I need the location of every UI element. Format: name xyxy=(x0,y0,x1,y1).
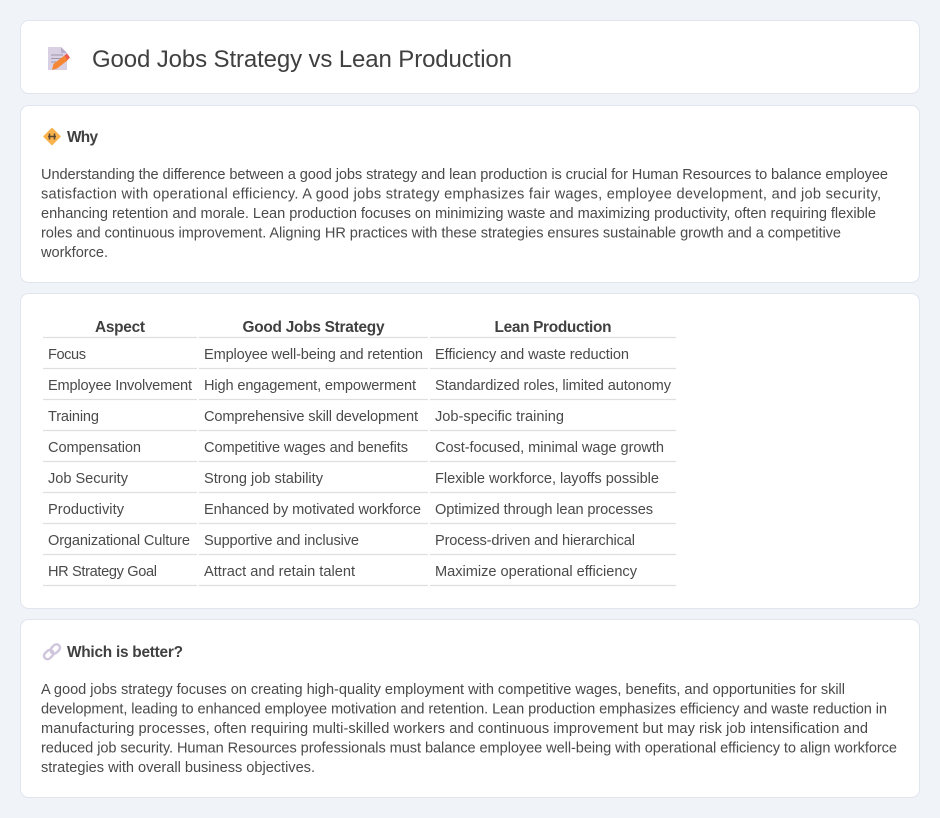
row: training xyxy=(48,409,564,425)
text block: why: Understanding the difference between a good jobs strategy and lean production is crucial for Human Resources to balance employee xyxy=(41,167,888,183)
row: organizational culture: Supportive and inclusive xyxy=(204,533,359,549)
row: focus: Employee well-being and retention xyxy=(204,347,423,363)
row: employee involvement: Standardized roles, limited autonomy xyxy=(435,378,672,394)
row: organizational culture xyxy=(48,533,635,549)
row: compensation: Compensation xyxy=(48,440,141,456)
text block: why: satisfaction with operational efficiency. A good jobs strategy emphasizes fair wages, employee development, and job security, xyxy=(41,186,881,202)
text block: which is better: strategies with overall business objectives. xyxy=(41,760,315,776)
row: organizational culture: Organizational Culture xyxy=(48,533,190,549)
row: job security: Flexible workforce, layoffs possible xyxy=(435,471,659,487)
text block: why: roles and continuous improvement. Aligning HR practices with these strategies ensures sustainable growth and a competitive xyxy=(41,226,841,242)
row: focus: Efficiency and waste reduction xyxy=(435,347,629,363)
row: job security: Strong job stability xyxy=(204,471,324,487)
row: hr strategy goal: HR Strategy Goal xyxy=(48,564,157,580)
row: employee involvement: High engagement, empowerment xyxy=(204,378,416,394)
row: hr strategy goal xyxy=(48,564,638,580)
row: job security xyxy=(48,471,659,487)
row: training: Comprehensive skill development xyxy=(204,409,418,425)
text block: why: workforce. xyxy=(40,245,108,261)
panel: comparison table xyxy=(20,294,920,608)
text block: which is better xyxy=(41,682,897,776)
table header: Lean Production xyxy=(494,319,612,336)
row: productivity: Enhanced by motivated workforce xyxy=(204,502,421,518)
text block: which is better: development, leading to enhanced employee motivation and retention. Lean production emphasizes efficiency and waste reduction in xyxy=(41,702,887,718)
icon: link xyxy=(43,643,61,661)
row: focus xyxy=(48,347,629,363)
text block: which is better: A good jobs strategy focuses on creating high-quality employment with competitive wages, benefits, and opportunities for skill xyxy=(41,682,845,698)
panel: why xyxy=(20,106,920,282)
row: training: Job-specific training xyxy=(435,409,564,425)
table rows xyxy=(43,338,676,586)
row: productivity: Productivity xyxy=(48,502,125,518)
panel: header xyxy=(20,20,920,94)
title: Good Jobs Strategy vs Lean Production xyxy=(92,46,512,73)
row: productivity xyxy=(48,502,653,518)
table header: Good Jobs Strategy xyxy=(242,319,385,336)
table header: Aspect xyxy=(95,319,145,336)
text block: which is better: manufacturing processes, often requiring multi-skilled workers and continuous improvement but may risk job intensification and xyxy=(41,721,868,737)
text block: which is better: reduced job security. Human Resources professionals must balance employee well-being with operational efficiency to align workforce xyxy=(41,740,897,756)
row: productivity: Optimized through lean processes xyxy=(435,502,653,518)
text block: why: enhancing retention and morale. Lean production focuses on minimizing waste and maximizing productivity, often requiring flexible xyxy=(41,206,876,222)
row: compensation: Competitive wages and benefits xyxy=(204,440,408,456)
heading: why: Why xyxy=(67,129,98,146)
row: organizational culture: Process-driven and hierarchical xyxy=(435,533,635,549)
row: hr strategy goal: Maximize operational efficiency xyxy=(435,564,638,580)
text block: why xyxy=(40,167,888,261)
row: training: Training xyxy=(48,409,99,425)
icon: memo with pencil xyxy=(48,47,70,70)
icon: orange diamond sign xyxy=(44,128,60,144)
row: employee involvement: Employee Involvement xyxy=(48,378,192,394)
row: job security: Job Security xyxy=(48,471,129,487)
table header xyxy=(95,319,612,336)
row: focus: Focus xyxy=(48,347,86,363)
row: compensation xyxy=(48,440,664,456)
row: hr strategy goal: Attract and retain talent xyxy=(204,564,355,580)
panel: which is better xyxy=(20,620,920,798)
row: compensation: Cost-focused, minimal wage growth xyxy=(435,440,664,456)
row: employee involvement xyxy=(48,378,672,394)
heading: which is better: Which is better? xyxy=(67,644,183,661)
